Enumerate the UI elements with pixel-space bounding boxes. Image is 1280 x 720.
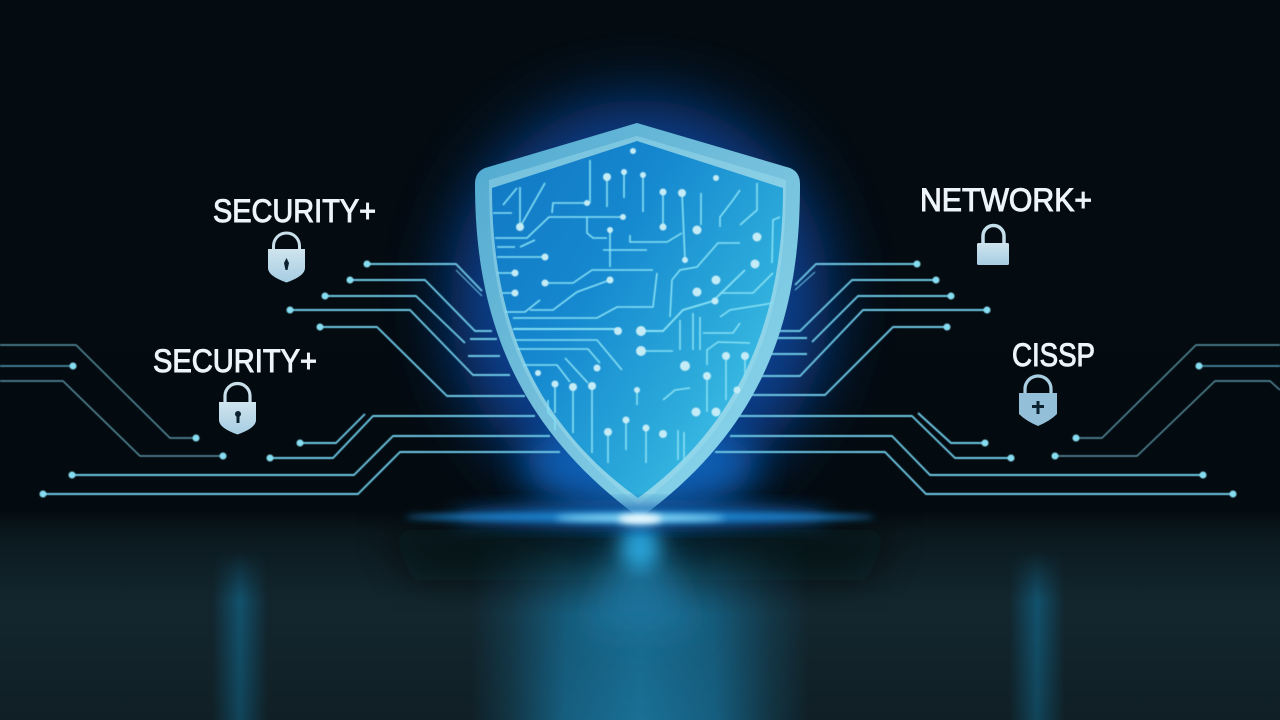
floor shadow under shield	[398, 545, 882, 588]
shield outer frame	[475, 123, 800, 518]
circuit traces: right side	[715, 264, 1280, 494]
shield circuit nodes	[512, 148, 762, 438]
circuit nodes: right side	[914, 260, 1236, 498]
floor reflection: light cone from tip	[585, 525, 695, 630]
floor reflection: right streak	[1012, 556, 1061, 720]
label: Security+ upper: SECURITY+	[213, 193, 376, 229]
floor reflection: left streak	[216, 556, 264, 720]
shield bevel highlight	[489, 136, 786, 505]
label: CISSP: CISSP	[1012, 337, 1095, 373]
floor reflection: bright beam core	[622, 522, 658, 570]
icon: padlock network	[977, 226, 1009, 265]
circuit nodes: left side	[40, 260, 370, 498]
blue glow behind shield	[450, 100, 830, 510]
icon: padlock CISSP	[1019, 376, 1057, 426]
shield internal circuit lines	[493, 160, 780, 463]
floor reflection: wide central light beam	[470, 530, 810, 720]
icon: padlock lower left	[219, 383, 256, 434]
circuit traces: left side	[0, 264, 560, 494]
light flare at shield tip	[405, 506, 875, 526]
shield	[475, 123, 800, 518]
shield circuit face	[492, 141, 783, 498]
label: Network+: NETWORK+	[920, 182, 1092, 218]
label: Security+ lower: SECURITY+	[153, 343, 317, 379]
reflective floor	[0, 510, 1280, 720]
icon: padlock upper left	[268, 233, 305, 282]
